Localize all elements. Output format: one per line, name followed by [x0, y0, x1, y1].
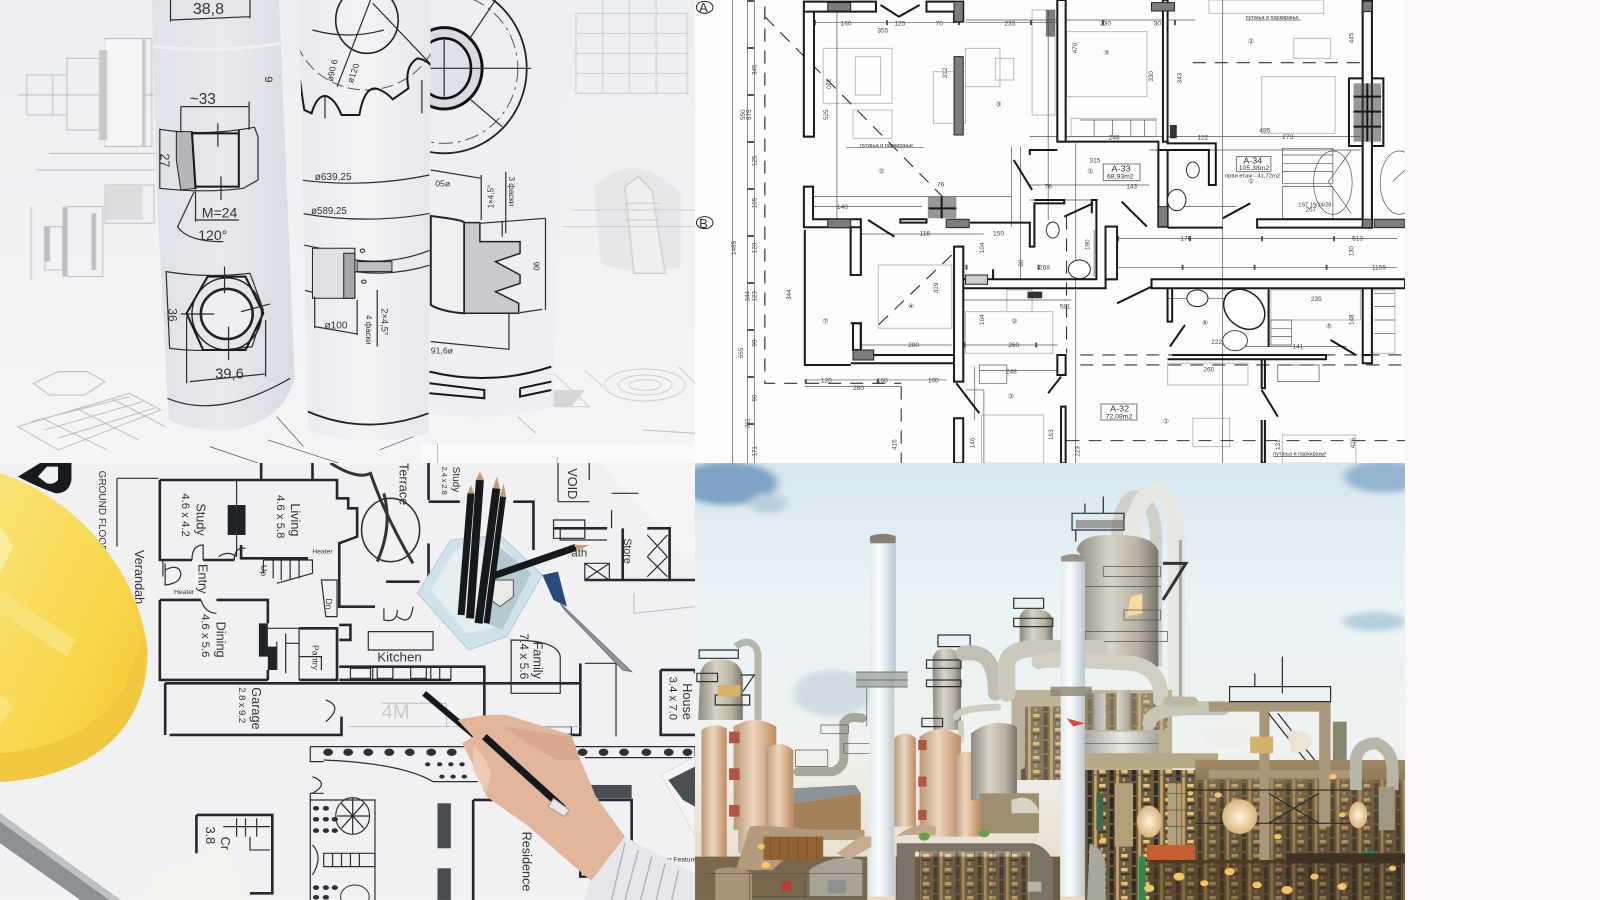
unit labels: A-33: [1112, 164, 1131, 174]
coffee cup: [143, 848, 246, 900]
dimensions: 416: [892, 439, 899, 450]
dimensions: 160: [877, 377, 888, 384]
unit labels: 1ST 19/24/28: [1298, 203, 1331, 209]
room labels: Store: [621, 538, 633, 564]
room labels: 2.4 x 2.8: [440, 467, 449, 495]
grid labels: A: [699, 0, 708, 15]
room labels: Study: [450, 467, 461, 492]
dimensions: 76: [1045, 183, 1052, 190]
room labels: House: [680, 683, 694, 720]
hand holding pencil: [424, 693, 695, 900]
unit labels: A-34: [1243, 155, 1262, 165]
roll 2: gear and flange: ø639,25: [315, 172, 352, 183]
sky: [690, 460, 1410, 900]
dimensions: 80: [1018, 259, 1025, 267]
dimensions: 200: [908, 342, 919, 349]
dimensions: 120: [752, 242, 759, 253]
dimensions: 345: [752, 64, 759, 75]
panel: house plan with helmet and hand: [0, 460, 697, 900]
dimensions: 260: [1203, 367, 1215, 374]
steel ruler: [0, 813, 121, 900]
dimensions: 355: [877, 27, 889, 34]
curled page corner: [598, 463, 695, 563]
roll 3: pulley: 91,6ø: [431, 345, 454, 355]
unit labels: [1101, 155, 1331, 420]
unit labels: први етаж - 41,72m2: [1225, 173, 1280, 179]
room labels: ath: [571, 548, 587, 560]
dimensions: 273: [1282, 134, 1294, 141]
dimensions: 125: [894, 20, 906, 27]
dimensions: 525: [823, 109, 830, 120]
dimensions: 235: [1311, 296, 1322, 303]
dimensions: 470: [1072, 42, 1079, 53]
faded background sketches, right: [547, 0, 695, 407]
room labels: Entry: [196, 564, 210, 594]
dimensions: 150: [993, 231, 1004, 238]
drawing compass: [542, 572, 632, 672]
sanitary fixtures: [966, 10, 1419, 383]
walls: [804, 0, 1405, 463]
roll 1: nut: 39,6: [215, 367, 244, 383]
room labels: Pantry: [310, 645, 320, 671]
dimensions: путања и паркирање: [1246, 15, 1299, 21]
dimensions: 30: [1154, 20, 1161, 27]
dimensions: 268: [1039, 264, 1050, 271]
roll 2: gear and flange: ø100: [325, 320, 348, 331]
dimensions: 495: [1259, 127, 1271, 134]
white sheet, lower right: [422, 445, 695, 463]
room labels: Residence: [519, 832, 533, 891]
ground-level pipework and lights: [695, 774, 1405, 900]
roll 2: gear and flange: ø120: [345, 63, 361, 84]
dimensions: 280: [853, 385, 864, 392]
roll 3: pulley: [429, 0, 554, 407]
dimensions: 90: [752, 394, 759, 402]
room labels: GROUND FLOOR: [96, 471, 107, 552]
dimensions: 343: [1176, 72, 1183, 83]
room labels: Study: [193, 503, 207, 536]
roll 1: nut: 27: [158, 153, 172, 167]
unit labels: 105,38m2: [1239, 165, 1270, 172]
calculator: [661, 757, 695, 837]
roll 1: nut: 120°: [198, 227, 227, 243]
dimensions: [731, 15, 1386, 458]
dimensions: ②: [1248, 38, 1254, 45]
dimensions: 122: [1197, 134, 1209, 141]
room labels: Cr: [218, 837, 232, 851]
unit labels: 68,93m2: [1107, 173, 1134, 180]
process equipment block: [1011, 690, 1218, 900]
panel: architectural floor plan: [690, 0, 1419, 463]
room labels: Garage: [249, 687, 263, 730]
dimensions: 248: [1006, 368, 1017, 375]
dimensions: 581: [1060, 303, 1071, 310]
dimensions: 100: [928, 377, 939, 384]
roll 1: nut: [152, 0, 295, 430]
dimension ~33: ~33: [190, 91, 216, 108]
dimensions: 655: [738, 347, 745, 358]
dimensions: ①: [1248, 178, 1254, 185]
dimensions: 223: [1074, 446, 1081, 457]
dimensions: ①: [1163, 418, 1169, 425]
dimensions: 163: [1048, 429, 1055, 440]
white stacks: [856, 534, 1092, 897]
dimensions: 148: [1348, 314, 1356, 325]
roll 1: nut: 6: [263, 76, 275, 83]
room labels: Dining: [213, 622, 228, 658]
shrubs: [313, 749, 692, 900]
dimensions: 105: [752, 197, 759, 208]
dimensions: 160: [841, 20, 852, 27]
room labels: Family: [530, 642, 544, 680]
dimensions: 513: [1352, 236, 1363, 243]
roll 3: pulley: 1×4,5°: [486, 185, 495, 208]
dimensions: 171: [752, 446, 759, 457]
dimensions: ③: [1103, 50, 1109, 57]
main distillation tower: [1072, 497, 1186, 667]
dimensions: 131: [1275, 439, 1282, 450]
dimensions: 330: [1148, 71, 1155, 82]
dimensions: ①: [1087, 168, 1093, 175]
room labels: Dn: [324, 598, 334, 610]
dimensions: 344: [745, 291, 752, 302]
dimensions: 116: [920, 231, 930, 238]
dimensions: 312: [942, 67, 949, 78]
pencils: [461, 480, 576, 623]
dimensions: 311: [745, 418, 752, 428]
room labels: 4.6 x 5.8: [274, 495, 286, 538]
roll 1: nut: 36: [166, 308, 180, 322]
dimensions: 235: [1005, 20, 1016, 27]
room labels: Terrace: [397, 463, 411, 505]
room labels: 4.6 x 4.2: [179, 493, 191, 537]
room labels: Water Feature: [654, 857, 697, 864]
dimensions: 146: [970, 437, 977, 448]
roll 2: gear and flange: 2×4,5°: [380, 308, 390, 336]
glasses: [330, 463, 420, 563]
dimensions: 550: [740, 109, 747, 120]
room labels: 4M: [382, 701, 410, 723]
room labels: Heater: [312, 548, 333, 555]
roll 2: gear and flange: ø90 6: [325, 59, 340, 82]
mid columns: [922, 598, 1053, 730]
clouds: [676, 461, 1422, 717]
dimensions: 260: [1008, 342, 1020, 349]
dimensions: 319: [933, 282, 940, 293]
dimensions: 190: [1084, 239, 1092, 250]
dimensions: ④: [908, 303, 914, 310]
dimensions: 76: [937, 182, 945, 189]
dimensions: 575: [746, 109, 753, 120]
grid labels: B: [699, 216, 708, 231]
dimensions: 99: [752, 339, 759, 347]
room labels: Living: [288, 503, 302, 536]
dimensions: 164: [979, 314, 986, 325]
roll 3: pulley: 05ø: [435, 179, 451, 189]
pencil holder: [417, 472, 589, 650]
driveway fence with shrubs: [310, 747, 695, 900]
dimensions: 222: [1211, 339, 1223, 346]
roll 2: gear and flange: ø589,25: [311, 206, 347, 217]
dimensions: ⑥: [1202, 320, 1208, 327]
dimensions: 320: [824, 78, 831, 89]
faded background sketches, left: [18, 38, 165, 450]
dimensions: 140: [837, 204, 848, 211]
panel: mechanical drawing rolls: [0, 0, 695, 463]
dimensions: 141: [1292, 344, 1304, 351]
dimensions: 445: [1348, 32, 1356, 43]
dimensions: 120: [821, 377, 832, 384]
dimensions: 344: [786, 289, 793, 300]
panel: refinery photograph: [676, 460, 1422, 900]
dimensions: 426: [1350, 437, 1357, 448]
room labels: 2.8 x 9.2: [237, 687, 247, 723]
dimensions: путања и паркирање: [1273, 452, 1326, 458]
dimensions: 1159: [1372, 264, 1386, 271]
room labels: Verandah: [132, 550, 146, 604]
trees and patio: [223, 798, 375, 900]
unit labels: 72,08m2: [1106, 413, 1133, 420]
dimensions: 130: [1348, 246, 1356, 257]
right steel structure: [1195, 657, 1405, 900]
roll 2: gear and flange: 4 фаски: [364, 315, 373, 345]
dimensions: 70: [936, 20, 943, 27]
dimensions: 123: [752, 291, 759, 302]
industrial shed: [793, 785, 861, 830]
dimensions: 248: [1109, 134, 1120, 141]
dimensions: ⑤: [1326, 323, 1332, 330]
room labels: 4.6 x 5.6: [199, 614, 211, 657]
tan process vessels: [701, 720, 1040, 873]
dimensions: 315: [1090, 158, 1101, 165]
floor plan walls: [117, 463, 695, 900]
room labels: [96, 463, 697, 891]
room labels: 7.4 x 5.6: [517, 633, 531, 680]
rear arch pipes: [736, 492, 1180, 720]
roll 3: pulley: 3 фаски: [507, 177, 516, 206]
dimensions: ③: [1008, 393, 1014, 400]
dimensions: ⑦: [822, 318, 828, 325]
faint furniture and guide lines: [733, 0, 1405, 463]
room labels: Kitchen: [377, 650, 422, 665]
dimensions: 143: [1126, 183, 1138, 190]
roll 1: nut: M=24: [202, 204, 238, 220]
dimension 38,8: 38,8: [193, 0, 224, 18]
room labels: 3.4 x 7.0: [667, 677, 679, 720]
dimensions: путања и паркирање: [860, 143, 913, 149]
dimensions: 230: [1100, 20, 1111, 27]
dimensions: 104: [979, 242, 986, 253]
room labels: 3.8: [203, 827, 217, 844]
left column tower: [697, 650, 754, 720]
yellow hard hat: [0, 463, 147, 782]
roll 2: gear and flange: [300, 0, 430, 439]
room labels: VOID: [565, 468, 579, 499]
unit labels: A-32: [1110, 404, 1129, 414]
room labels: Up: [259, 565, 269, 576]
dimensions: 267: [1305, 207, 1317, 214]
room labels: Heater: [174, 589, 195, 596]
dimensions: ②: [1011, 318, 1018, 325]
dimensions: 1465: [731, 241, 738, 255]
connecting pipes: [798, 648, 1223, 772]
grid labels: [696, 0, 713, 231]
dimensions: ②: [878, 168, 884, 175]
roll 3: pulley: 90: [531, 262, 540, 271]
dimensions: 125: [752, 155, 759, 166]
dimensions: 176: [1180, 236, 1192, 243]
dimensions: ③: [995, 102, 1002, 109]
